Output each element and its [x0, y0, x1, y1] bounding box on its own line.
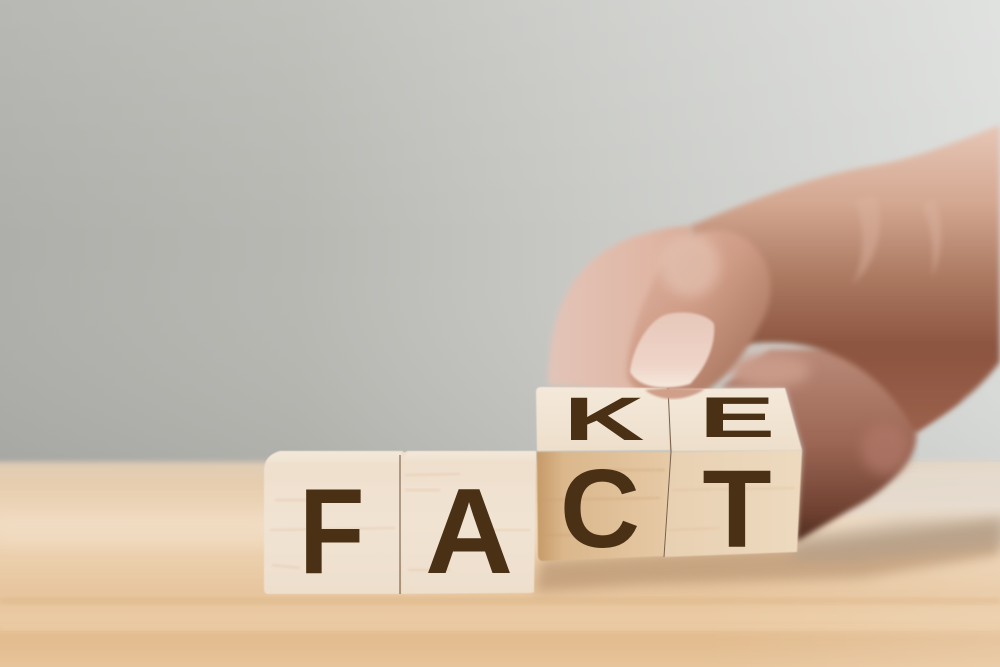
letter T: T [702, 448, 772, 571]
block: C [537, 447, 670, 571]
thumb [627, 230, 771, 400]
hand [548, 125, 1000, 542]
block: E top [666, 386, 802, 451]
block seam [399, 455, 401, 594]
letter E: E [699, 386, 775, 450]
block: K top [536, 385, 670, 454]
wooden table [0, 462, 1000, 667]
knuckle crease light [855, 206, 879, 280]
letter C: C [560, 447, 640, 571]
shadow under hand and blocks [535, 515, 1000, 592]
index finger [546, 224, 692, 388]
thumb tip overlapping block [645, 388, 705, 399]
block: A [401, 451, 536, 599]
thumb nail [630, 312, 714, 388]
block seams [664, 388, 671, 557]
wall background [0, 0, 1000, 480]
back of hand [690, 125, 1000, 432]
letter A: A [425, 463, 513, 599]
lower fingers [720, 345, 960, 542]
middle finger highlight [730, 353, 810, 387]
thumb lit highlight [660, 233, 720, 297]
block: F [264, 451, 403, 600]
letter F: F [299, 464, 365, 600]
ring finger tip [861, 422, 909, 474]
block: T [664, 448, 802, 571]
letter K: K [563, 385, 645, 454]
